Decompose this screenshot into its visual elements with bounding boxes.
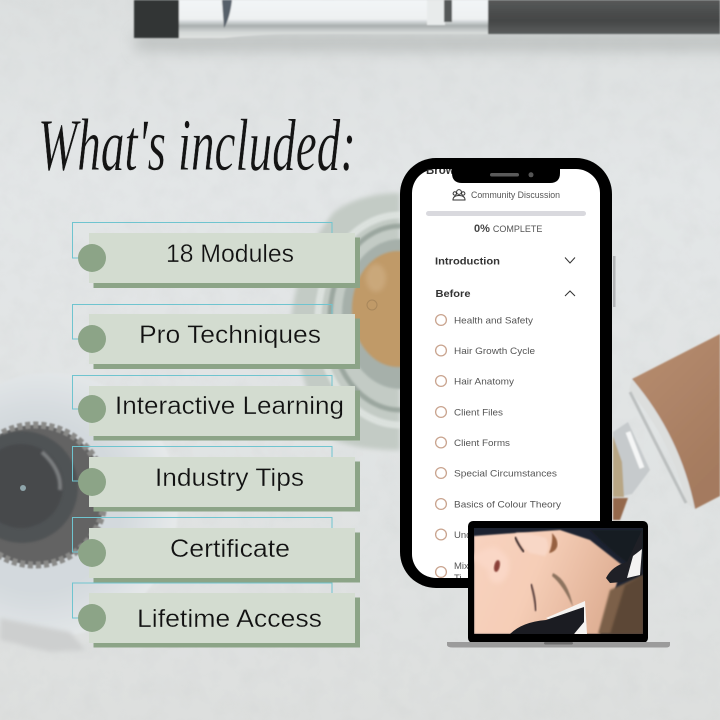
laptop body [468, 521, 648, 643]
progress bar [426, 211, 586, 216]
laptop mockup [447, 521, 670, 648]
list item: Interactive Learning: Interactive Learning [115, 392, 344, 420]
lesson list: Under [454, 530, 480, 541]
list item: 18 Modules: 18 Modules [166, 240, 294, 268]
list item: Pro Techniques: Pro Techniques [139, 321, 321, 349]
list item: Pro Techniques [72, 304, 360, 369]
lesson list: Special Circumstances [454, 468, 557, 480]
list item: Lifetime Access [72, 583, 360, 648]
white lid with dark ridged cap [0, 373, 210, 652]
progress label: 0% COMPLETE [474, 223, 542, 235]
section: Before [436, 290, 576, 297]
list item: Industry Tips [72, 446, 360, 512]
list item: Industry Tips: Industry Tips [155, 464, 304, 492]
list item: Certificate [72, 518, 360, 582]
makeup brush [134, 0, 720, 38]
list item: Interactive Learning [72, 376, 360, 440]
lesson list: Client Forms [454, 438, 510, 449]
lesson list: Ti [454, 573, 462, 584]
title: What's included: [38, 105, 356, 187]
community discussion row: Community Discussion [471, 190, 560, 200]
lesson list: Mix [454, 561, 469, 572]
lesson list: Basics of Colour Theory [454, 500, 561, 510]
phone notch [452, 169, 560, 183]
glass jar with amber product [290, 193, 482, 450]
lesson list: Hair Anatomy [454, 376, 514, 388]
section: Introduction [436, 257, 576, 264]
list item: 18 Modules [72, 222, 360, 288]
section: Introduction: Introduction [435, 256, 500, 268]
lesson list [436, 315, 561, 584]
laptop base [447, 642, 670, 648]
section: Before: Before [436, 288, 471, 300]
lesson list: Health and Safety [454, 316, 533, 326]
phone mockup [400, 158, 616, 588]
laptop screen: brow treatment photo [474, 528, 643, 634]
list item: Certificate: Certificate [170, 535, 290, 563]
list item: Lifetime Access: Lifetime Access [137, 605, 322, 633]
lesson list: Hair Growth Cycle [454, 346, 535, 357]
lesson list: Client Files [454, 408, 503, 418]
course title cut off at top: Brow [426, 165, 455, 177]
cosmetic tube [613, 334, 720, 520]
